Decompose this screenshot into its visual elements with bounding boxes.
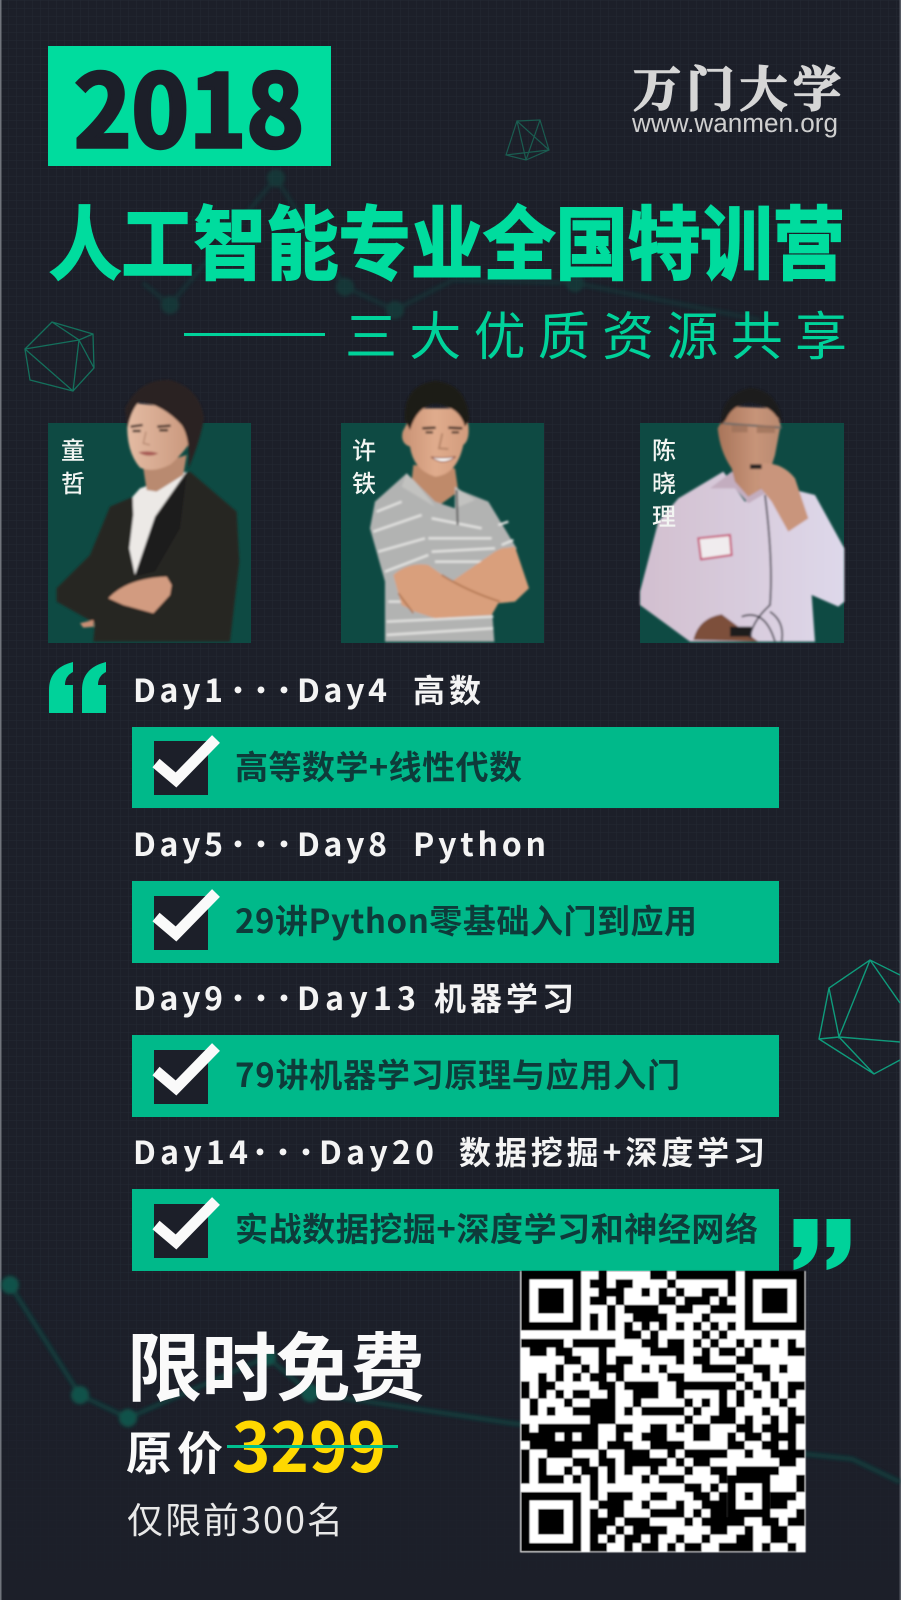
- price: original price: [126, 1393, 398, 1492]
- name: Xu Tie: [352, 431, 376, 499]
- heading: day 5-8: [133, 820, 546, 866]
- course label: 29讲Python零基础入门到应用: [235, 895, 697, 943]
- heading: day 9-13: Day13: [297, 974, 416, 1020]
- row: day 1-4: [132, 727, 779, 808]
- row: day 14-20: [132, 1189, 779, 1271]
- portrait: Tong Zhe: [57, 380, 239, 642]
- heading: day 9-13: ·: [245, 974, 277, 1020]
- heading: day 1-4: 高数: [413, 666, 481, 712]
- icon: check box: [154, 893, 216, 950]
- heading: day 5-8: ·: [245, 820, 277, 866]
- icon: check box: [154, 1047, 216, 1104]
- note: first 300 only: 仅限前300名: [127, 1492, 343, 1544]
- name: Chen Xiaoli: 理: [652, 497, 676, 532]
- logo: wanmen: [631, 51, 841, 138]
- logo name: 万门大学: [633, 51, 841, 120]
- price label: 原价: [126, 1418, 223, 1484]
- decorative polygon: top centre: [506, 120, 549, 160]
- panel: teacher Xu Tie: [341, 381, 544, 643]
- heading: day 14-20: ·: [290, 1128, 322, 1174]
- name: Chen Xiaoli: [652, 431, 676, 532]
- heading: day 14-20: 数据挖掘+深度学习: [459, 1128, 765, 1174]
- name: Xu Tie: 许: [352, 431, 376, 466]
- heading: day 9-13: Day9: [133, 974, 223, 1020]
- name: Tong Zhe: 哲: [61, 464, 85, 499]
- portrait: Xu Tie: [370, 381, 529, 642]
- heading: day 1-4: ·: [268, 666, 300, 712]
- course label: 实战数据挖掘+深度学习和神经网络: [235, 1203, 758, 1251]
- panel: teacher Tong Zhe: [48, 380, 251, 643]
- heading: day 1-4: Day4: [297, 666, 387, 712]
- heading: day 14-20: Day14: [133, 1128, 248, 1174]
- heading: day 1-4: ·: [222, 666, 254, 712]
- logo url: www.wanmen.org: [631, 108, 838, 138]
- heading: day 9-13: 机器学习: [434, 974, 574, 1020]
- heading: day 5-8: ·: [268, 820, 300, 866]
- name: Xu Tie: 铁: [352, 464, 376, 499]
- course label: 高等数学+线性代数: [235, 741, 522, 789]
- heading: day 9-13: ·: [268, 974, 300, 1020]
- course label: 79讲机器学习原理与应用入门: [235, 1049, 680, 1097]
- price value: 3299: [232, 1393, 386, 1492]
- decorative polygon: left: [25, 322, 94, 391]
- name: Tong Zhe: 童: [61, 431, 85, 466]
- portrait: Chen Xiaoli: [640, 388, 844, 642]
- row: day 5-8: [132, 881, 779, 963]
- heading: day 9-13: [133, 974, 574, 1020]
- background chart: bottom: [1, 1276, 900, 1482]
- background chart: top: [143, 169, 760, 320]
- name: Chen Xiaoli: 晓: [652, 464, 676, 499]
- icon: check box: [154, 1201, 216, 1258]
- heading: day 14-20: ·: [267, 1128, 299, 1174]
- heading: day 14-20: [133, 1128, 765, 1174]
- heading: day 5-8: Python: [413, 820, 546, 866]
- heading: day 1-4: ·: [245, 666, 277, 712]
- heading: day 14-20: Day20: [319, 1128, 434, 1174]
- heading: day 5-8: Day8: [297, 820, 387, 866]
- heading: day 14-20: ·: [244, 1128, 276, 1174]
- heading: day 1-4: [133, 666, 481, 712]
- icon: check box: [154, 739, 216, 795]
- name: Chen Xiaoli: 陈: [652, 431, 676, 466]
- headline: limited-time free: 限时免费: [127, 1308, 425, 1417]
- year badge: 2018: [74, 31, 304, 176]
- strike line: [227, 1445, 398, 1448]
- panel: teacher Chen Xiaoli: [640, 388, 844, 643]
- decorative polygon: right: [819, 960, 900, 1074]
- heading: day 5-8: Day5: [133, 820, 223, 866]
- heading: day 9-13: ·: [222, 974, 254, 1020]
- row: day 9-13: [132, 1035, 779, 1117]
- subtitle: 三大优质资源共享: [345, 295, 847, 370]
- icon: closing quote: [794, 1219, 850, 1270]
- QR code: [520, 1271, 806, 1552]
- icon: opening quote: [49, 662, 106, 713]
- heading: day 5-8: ·: [222, 820, 254, 866]
- name: Tong Zhe: [61, 431, 85, 499]
- heading: day 1-4: Day1: [133, 666, 223, 712]
